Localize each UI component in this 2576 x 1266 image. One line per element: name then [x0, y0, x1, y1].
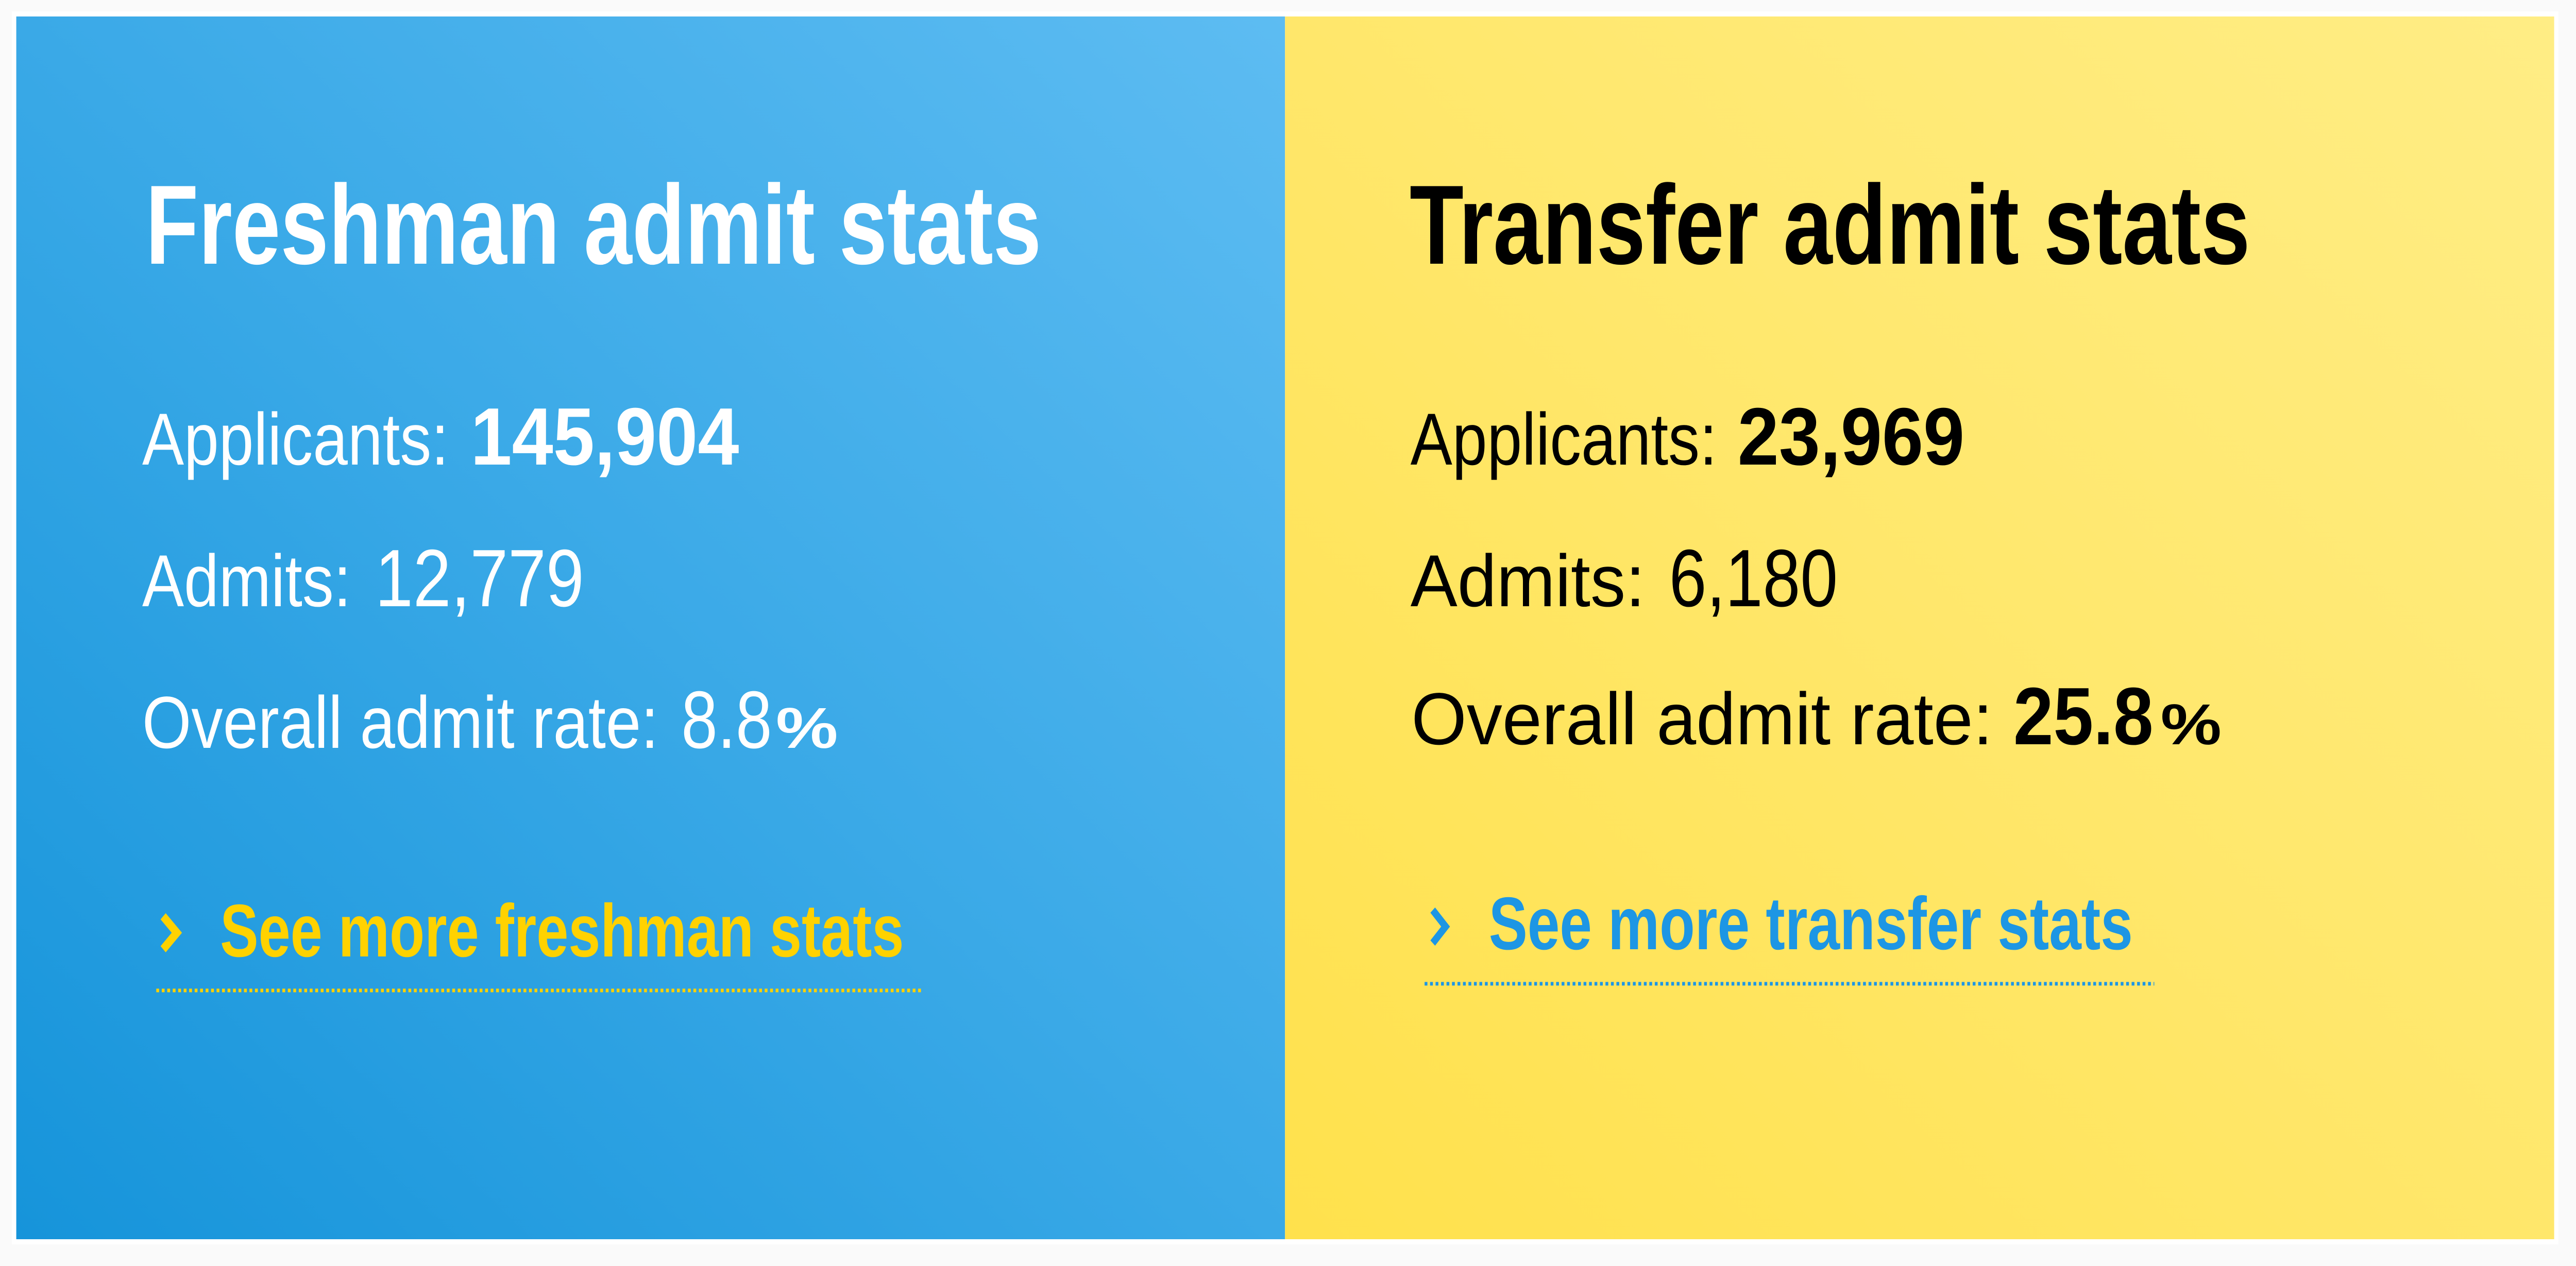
panel: freshman admit stats — [16, 16, 1285, 1239]
icon: chevron — [1433, 910, 1446, 943]
stat: applicants — [1411, 391, 1964, 482]
link: see more transfer stats: See more transfer stats — [1489, 882, 2133, 965]
stat: overall admit rate — [1411, 671, 2222, 762]
stat: applicants: 145,904 — [470, 391, 739, 482]
stat: overall admit rate: 8.8 — [681, 675, 772, 765]
stat: admits — [142, 533, 584, 624]
stat: overall admit rate: % — [2161, 692, 2222, 757]
stat: admits: Admits: — [142, 540, 351, 622]
stat: overall admit rate: 25.8 — [2013, 671, 2154, 762]
stat: admits: Admits: — [1411, 540, 1645, 622]
stat: overall admit rate: Overall admit rate: — [142, 682, 658, 764]
stat: applicants — [142, 391, 739, 482]
stat: overall admit rate — [142, 675, 838, 765]
heading: Freshman admit stats: Freshman admit stats — [146, 162, 1041, 288]
stat: overall admit rate: Overall admit rate: — [1411, 678, 1993, 760]
stat: applicants: Applicants: — [142, 399, 449, 481]
icon: chevron — [163, 916, 177, 949]
stat: admits: 6,180 — [1669, 533, 1838, 624]
stat: admits — [1411, 533, 1838, 624]
stat: applicants: 23,969 — [1738, 391, 1964, 482]
stat: admits: 12,779 — [375, 533, 584, 624]
stat: applicants: Applicants: — [1411, 399, 1717, 481]
heading: Transfer admit stats: Transfer admit stats — [1410, 162, 2250, 288]
link: see more freshman stats: See more freshman stats — [220, 889, 904, 972]
panel: transfer admit stats — [1285, 16, 2554, 1239]
stat: overall admit rate: % — [776, 696, 838, 760]
